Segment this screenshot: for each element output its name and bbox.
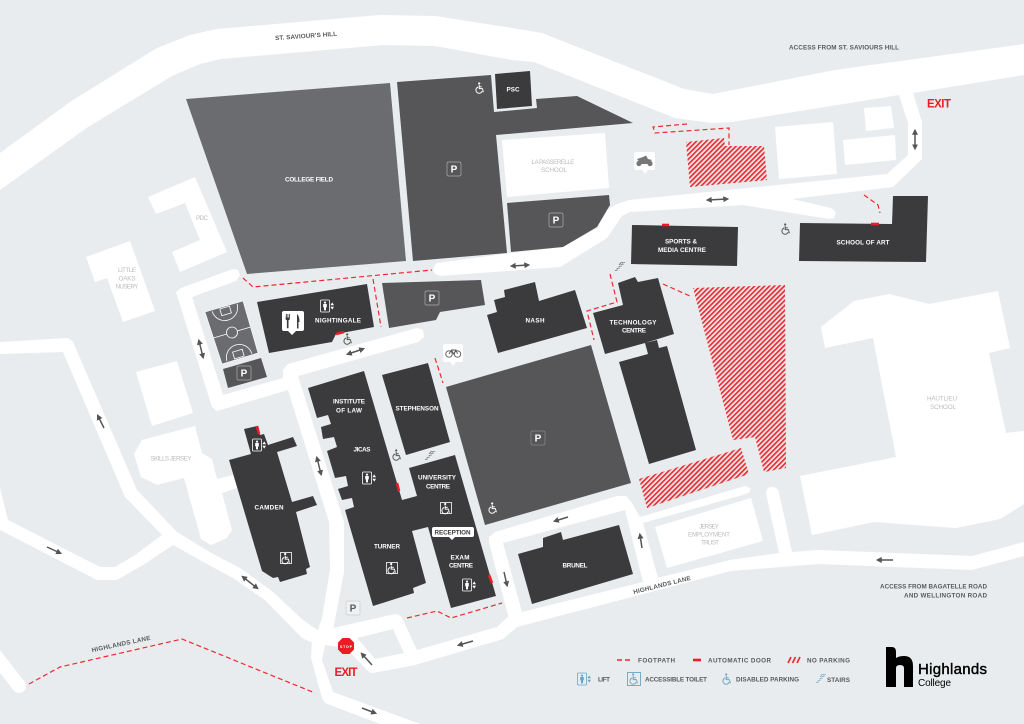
building: Stephenson: STEPHENSON [396,406,439,412]
icon: parking, south of Turner [346,601,360,615]
building: Sports and Media Centre: SPORTS & [665,238,697,246]
legend: footpath [617,658,675,664]
sports court [205,301,258,364]
building: Institute of Law, JICAS, Turner, University and Exam Centre: EXAM [450,554,470,562]
exit label, south: EXIT [334,667,358,679]
building: Brunel [518,525,633,604]
icon: parking, main car park: P [451,164,458,176]
label: access from Bagatelle Road and Wellington Road: AND WELLINGTON ROAD [904,592,987,600]
icon: accessible toilet Turner [386,562,398,574]
label: access from Bagatelle Road and Wellington Road: ACCESS FROM BAGATELLE ROAD [880,584,987,590]
icon: lift [252,439,266,451]
automatic doors [257,224,879,583]
neighbouring building: unnamed west block [136,361,193,426]
neighbouring building: Hautlieu School [800,291,1024,535]
logo: Highlands College: College [918,678,951,689]
icon: parking, beside court [237,366,251,380]
building: School of Art: SCHOOL OF ART [836,240,890,246]
icon: parking, beside court: P [241,368,248,380]
building: Institute of Law, JICAS, Turner, University and Exam Centre: UNIVERSITY [418,474,457,482]
building: Institute of Law, JICAS, Turner, University and Exam Centre [308,371,496,608]
legend: accessible toilet: ACCESSIBLE TOILET [645,676,707,684]
no parking zones [639,138,786,508]
icon: lift Exam Centre [462,579,476,591]
building: School of Art [799,196,928,262]
stop sign: STOP [340,645,353,649]
building: Institute of Law, JICAS, Turner, University and Exam Centre: CENTRE [449,562,473,570]
icon: accessible toilet University Centre [440,502,452,514]
logo: Highlands College: Highlands [918,661,987,678]
legend: disabled parking: DISABLED PARKING [736,676,799,684]
building: Brunel: BRUNEL [562,562,588,570]
label: access from Bagatelle Road and Wellington Road [880,584,987,600]
building: Stephenson [382,363,450,455]
marker: reception [432,527,474,540]
road label: Highlands Lane west: HIGHLANDS LANE [91,635,151,654]
legend: accessible toilet [628,672,707,686]
building: Institute of Law, JICAS, Turner, University and Exam Centre: INSTITUTE [333,398,365,406]
icon: stairs, Technology Centre [615,262,625,270]
legend: lift [578,673,610,685]
icon: parking, north of Brunel: P [535,434,542,444]
neighbouring building: Skills Jersey [134,426,237,545]
neighbouring building: Skills Jersey: SKILLS JERSEY [150,456,192,462]
building: Nash [487,282,587,353]
marker: reception: RECEPTION [434,530,471,536]
road label: Highlands Lane east: HIGHLANDS LANE [633,575,692,596]
neighbouring building: La Passerelle School [502,133,609,197]
icon: disabled parking, Nightingale [344,333,351,344]
icon: stairs, University Centre [425,452,435,460]
car park: north of Nash [382,280,485,328]
neighbouring building: PDC: PDC [196,215,208,222]
panel: College Field [186,83,406,274]
building: Nightingale: NIGHTINGALE [315,318,361,324]
icon: lift JICAS [362,472,376,484]
neighbouring building: PDC [148,177,227,272]
car park: north of Brunel [446,345,631,525]
label: access from St Saviours Hill: ACCESS FROM ST. SAVIOURS HILL [789,44,899,52]
building: Institute of Law, JICAS, Turner, University and Exam Centre: JICAS [354,446,370,454]
building: Institute of Law, JICAS, Turner, University and Exam Centre: OF LAW [336,408,362,414]
icon: accessible toilet Camden [280,552,292,564]
icon: parking, south of Turner: P [350,604,357,614]
car park: south of La Passerelle [507,195,610,252]
neighbouring building: Little Oaks Nursery [86,241,155,322]
panel: main car park [397,75,633,261]
traffic arrows [47,131,915,713]
building: Technology Centre [593,277,696,464]
marker: food [282,311,304,335]
neighbouring building: Jersey Employment Trust [655,498,763,568]
neighbouring building: Hautlieu School: HAUTLIEU [927,396,957,402]
icon: parking, north of Nash: P [429,294,436,304]
neighbouring building: Little Oaks Nursery: LITTLE [118,267,136,274]
icon: parking, south of La Passerelle: P [553,216,560,226]
neighbouring building: Jersey Employment Trust: TRUST [701,540,719,546]
icon: parking, south of La Passerelle [549,213,563,227]
icon: disabled parking [476,82,483,93]
building: Camden: CAMDEN [254,504,284,512]
neighbouring building: Jersey Employment Trust: JERSEY [699,524,720,530]
neighbouring building: Hautlieu School: SCHOOL [930,404,956,411]
neighbouring building: La Passerelle School: SCHOOL [541,167,567,174]
car park: beside court [223,358,267,388]
neighbouring building: Little Oaks Nursery: OAKS [118,276,136,282]
neighbouring building: Little Oaks Nursery: NUSERY [116,284,139,290]
legend: no parking: NO PARKING [807,658,850,664]
legend: stairs: STAIRS [827,677,850,684]
building: Institute of Law, JICAS, Turner, University and Exam Centre: CENTRE [426,484,450,490]
panel: College Field: COLLEGE FIELD [285,176,333,184]
building: Sports and Media Centre [631,225,738,266]
building: PSC [495,71,532,109]
neighbouring building: Jersey Employment Trust: EMPLOYMENT [688,532,730,538]
building: Technology Centre: CENTRE [622,328,646,334]
exit label, north: EXIT [927,98,951,110]
legend: disabled parking [723,673,799,684]
legend: lift: LIFT [598,676,610,684]
stop sign [338,638,354,654]
neighbouring buildings: top right blocks [775,106,896,179]
icon: disabled parking, Stephenson [393,449,400,460]
building: Nightingale [257,284,374,353]
building: PSC: PSC [506,86,520,94]
legend [578,657,850,686]
building: Institute of Law, JICAS, Turner, University and Exam Centre: TURNER [374,544,400,550]
neighbouring building: La Passerelle School: LA PASSERELLE [532,159,574,166]
legend: stairs [816,674,850,684]
icon: parking, main car park [447,162,461,176]
road label: St Saviour's Hill: ST. SAVIOUR'S HILL [275,31,337,42]
building: Technology Centre: TECHNOLOGY [610,320,657,326]
icon: parking, north of Nash [425,291,439,305]
marker: bicycle parking [443,344,463,366]
legend: footpath: FOOTPATH [638,658,675,664]
icon: lift [320,300,334,312]
building: Sports and Media Centre: MEDIA CENTRE [658,247,706,254]
logo: Highlands College [886,647,987,689]
icon: disabled parking, School of Art [782,223,789,234]
building: Camden [229,426,317,582]
legend: automatic door: AUTOMATIC DOOR [708,658,771,664]
icon: disabled parking, south car park [489,502,496,513]
legend: no parking [788,657,850,664]
building: Nash: NASH [526,318,545,324]
icon: parking, north of Brunel [531,431,545,445]
marker: motorcycle parking [634,152,655,174]
footpaths [29,124,880,693]
